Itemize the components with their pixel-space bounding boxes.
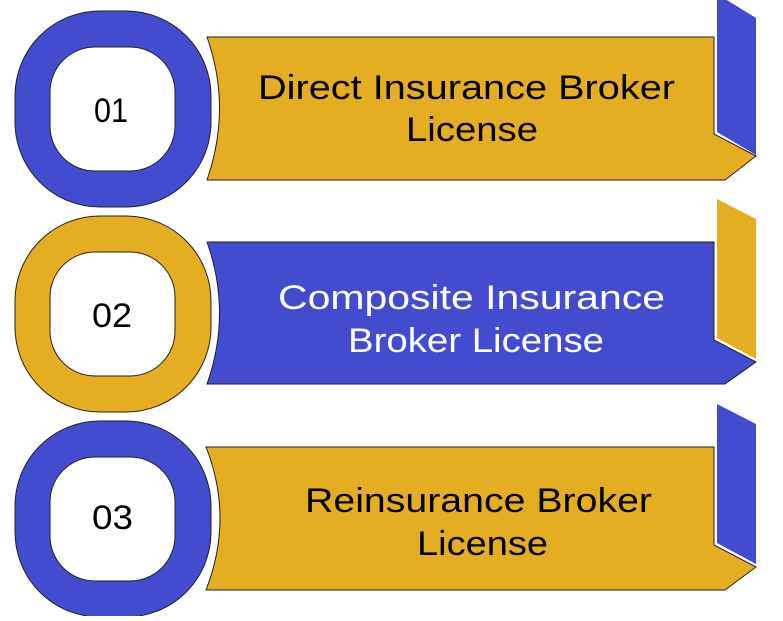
row 1: License xyxy=(406,111,538,149)
flap 2 xyxy=(717,199,756,359)
ring 2 xyxy=(15,216,211,412)
banner 2 xyxy=(207,242,756,384)
ring 1 xyxy=(15,11,211,207)
row 3: License xyxy=(417,525,548,563)
inner 1 xyxy=(50,47,175,171)
ring 3 xyxy=(15,421,211,617)
flap 1 xyxy=(717,0,756,155)
banner 3 xyxy=(206,447,756,590)
flap 3 xyxy=(717,404,756,564)
row 2 xyxy=(15,199,756,412)
number 02: 02 xyxy=(92,297,132,335)
label 1: Direct Insurance Broker xyxy=(258,69,675,107)
banner 1 xyxy=(207,37,756,180)
number 01: 01 xyxy=(94,92,128,130)
row 1 xyxy=(15,0,756,207)
inner 2 xyxy=(50,252,175,376)
label 3: Reinsurance Broker xyxy=(305,482,652,520)
label 2: Composite Insurance xyxy=(278,279,665,317)
number 03: 03 xyxy=(92,499,133,537)
row 2: Broker License xyxy=(348,322,604,360)
inner 3 xyxy=(50,457,175,581)
row 3 xyxy=(15,404,756,617)
